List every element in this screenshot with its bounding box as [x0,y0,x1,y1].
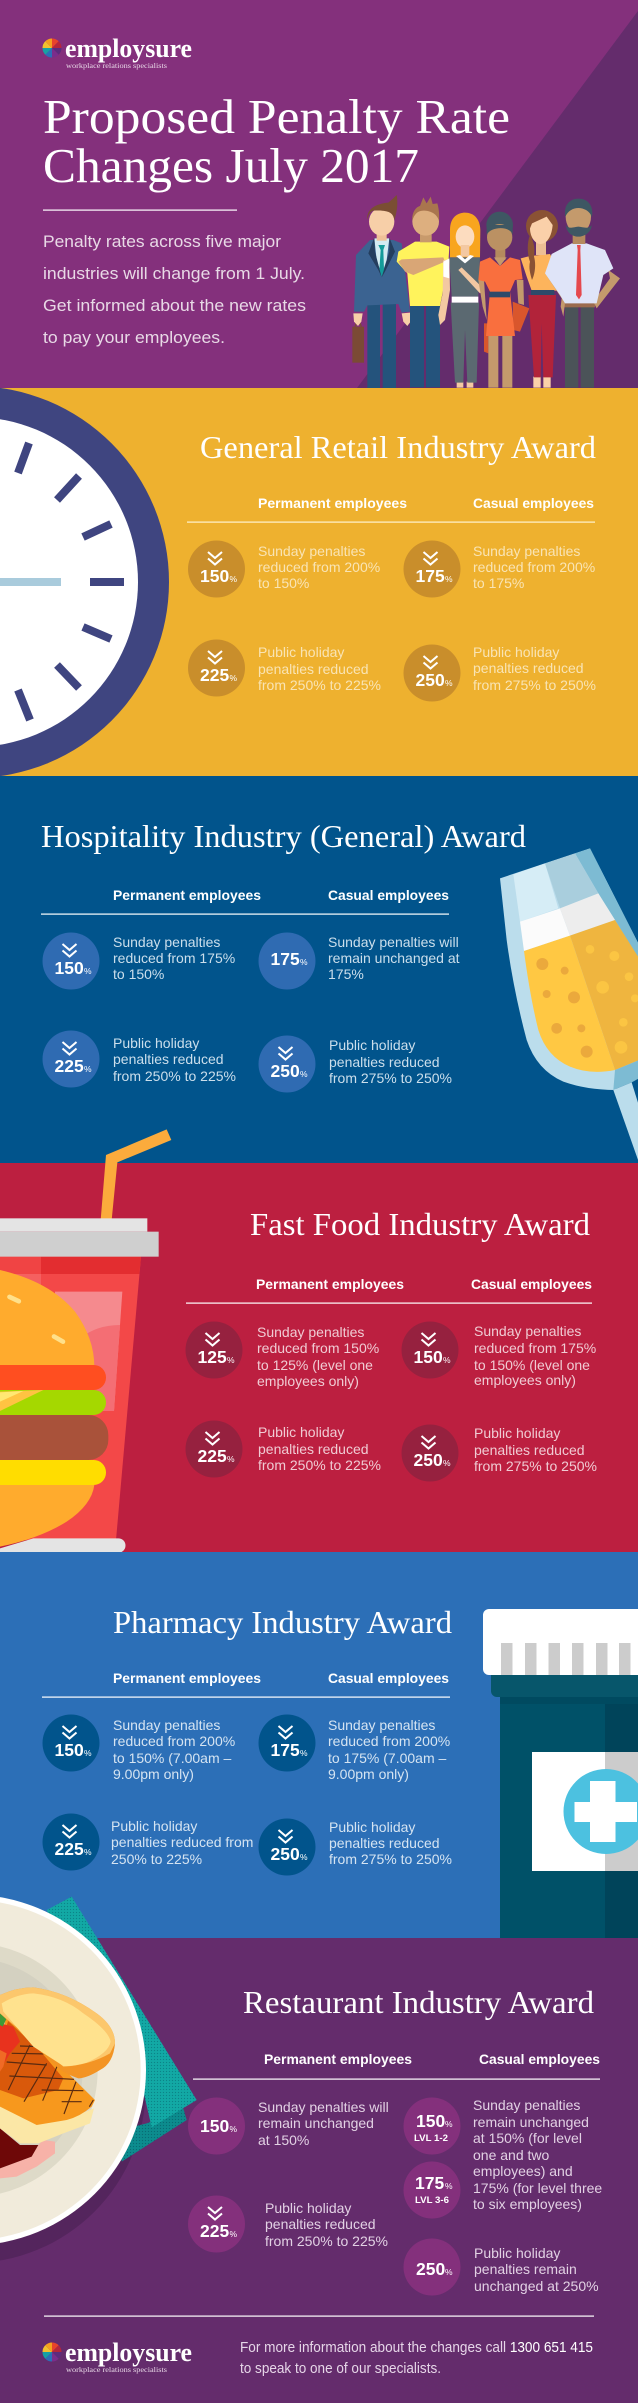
text: sunday permanent: 9.00pm only) [113,1766,194,1782]
text: sunday permanent: at 150% [258,2132,309,2148]
text: sunday casual: employees) and [473,2163,573,2179]
badge: 175%: 175 [270,949,300,969]
column headings: Permanent employees [264,2052,412,2067]
text: sunday casual: reduced from 200% [328,1733,450,1749]
logo [42,34,192,70]
panel: General Retail Industry Award [0,386,638,778]
text: public holiday permanent: from 250% to 225% [258,1457,381,1473]
text: sunday permanent: Sunday penalties will [258,2099,389,2115]
badge: 150%: % [84,966,92,976]
badge: 250% [404,2238,460,2296]
badge: 150% [188,540,245,598]
panel: Hospitality Industry (General) Award [0,776,638,1175]
text: sunday casual: 175% (for level three [473,2180,602,2196]
icon: pill bottle [483,1609,638,1939]
text: sunday permanent: reduced from 150% [257,1340,379,1356]
text: public holiday casual: Public holiday [474,2245,560,2261]
text: sunday permanent [113,1717,235,1782]
badge: 150%: 150 [200,2116,229,2136]
text: public holiday casual: from 275% to 250% [474,1458,597,1474]
text: sunday casual [328,934,460,982]
badge: 250%: 250 [270,1061,300,1081]
text: public holiday permanent [265,2200,388,2249]
text: public holiday casual: from 275% to 250% [329,1070,452,1086]
footer text: to speak to one of our specialists. [240,2361,441,2377]
text: sunday permanent: Sunday penalties [258,543,365,559]
text: public holiday casual [329,1819,452,1867]
badge: 150% level 1-2: % [445,2119,453,2129]
footer logo: workplace relations specialists [66,2366,167,2374]
person: man in yellow t-shirt [397,197,449,387]
logo: workplace relations specialists [66,62,167,70]
illustration: plate of food [0,1895,197,2263]
intro text: Penalty rates across five major [43,232,281,251]
text: sunday casual: Sunday penalties [328,1717,435,1733]
text: public holiday casual [474,1425,597,1474]
badge: 150% level 1-2 [404,2098,460,2154]
text: sunday permanent: remain unchanged [258,2115,374,2131]
heading: Pharmacy Industry Award [113,1604,452,1640]
person: bearded man in shirt [545,199,620,388]
badge: 125%: 125 [198,1347,227,1367]
badge: 150%: 150 [200,566,229,586]
illustration: cup and burger [0,1129,171,1553]
text: public holiday permanent: 250% to 225% [111,1851,202,1867]
text: sunday permanent [113,934,235,982]
text: sunday permanent: to 125% (level one [257,1357,373,1373]
column headings: Permanent employees [256,1277,404,1292]
person: man in suit [352,195,411,388]
text: public holiday permanent: penalties reduced [258,1441,369,1457]
text: public holiday permanent: Public holiday [258,644,344,660]
text: sunday casual: one and two [473,2147,549,2163]
heading: Hospitality Industry (General) Award [41,818,526,854]
column headings [42,1671,450,1698]
text: public holiday casual [329,1037,452,1086]
text: sunday casual: 175% [328,966,364,982]
badge: 250% [404,644,460,702]
badge: 225%: 225 [200,665,229,685]
badge: 150%: 150 [54,958,84,978]
header panel [0,0,638,388]
person: woman with braid [521,210,562,388]
column headings: Permanent employees [258,496,407,511]
text: sunday casual: Sunday penalties [473,543,580,559]
badge: 175%: 175 [270,1740,300,1760]
badge: 225% [188,640,245,696]
badge: 225%: % [227,1454,235,1464]
text: public holiday permanent: from 250% to 225% [113,1068,236,1084]
column headings [187,496,595,523]
person: woman in orange dress [478,212,529,388]
title: Proposed Penalty Rate [43,89,510,144]
text: public holiday casual [474,2245,599,2294]
text: public holiday casual: penalties remain [474,2261,577,2277]
column headings [193,2052,600,2080]
text: public holiday casual [473,644,596,693]
badge: 225%: % [230,2229,238,2239]
text: public holiday casual: from 275% to 250% [473,677,596,693]
badge: 150% [42,932,100,990]
column headings: Permanent employees [113,1671,261,1686]
intro text: industries will change from 1 July. [43,264,305,283]
footer text: For more information about the changes call 1300 651 415 [240,2340,593,2356]
badge: 150%: 150 [54,1740,84,1760]
badge: 150%: 150 [414,1347,443,1367]
text: sunday permanent [257,1324,379,1389]
text: sunday casual: 9.00pm only) [328,1766,409,1782]
text: public holiday permanent: penalties reduced from [111,1834,253,1850]
text: sunday permanent: Sunday penalties [113,1717,220,1733]
text: public holiday permanent: Public holiday [111,1818,197,1834]
badge: 150%: % [230,2124,238,2134]
footer text [240,2340,593,2377]
text: sunday casual [473,543,595,591]
badge: 175% level 3-6: % [445,2181,453,2191]
panel: Pharmacy Industry Award [0,1552,638,1939]
badge: 225%: 225 [200,2221,229,2241]
text: public holiday permanent: Public holiday [113,1035,199,1051]
badge: 150%: % [230,574,238,584]
column headings: Casual employees [479,2052,600,2067]
text: sunday permanent: to 150% (7.00am – [113,1750,232,1766]
text: sunday permanent: Sunday penalties [257,1324,364,1340]
text: sunday permanent: to 150% [258,575,309,591]
column headings [41,888,449,915]
column headings: Permanent employees [113,888,261,903]
text: sunday casual: Sunday penalties will [328,934,459,950]
text: sunday casual: Sunday penalties [473,2097,580,2113]
badge: 150% [402,1322,458,1378]
badge: 225% [42,1814,100,1870]
text: public holiday permanent: penalties reduced [258,661,369,677]
heading: Fast Food Industry Award [250,1206,590,1242]
badge: 250%: % [445,2267,453,2277]
column headings: Casual employees [328,888,449,903]
badge: 250% [258,1818,316,1876]
badge: 250%: % [445,678,453,688]
text: public holiday casual: Public holiday [473,644,559,660]
logo: employsure [65,34,192,63]
person: woman with orange hair [438,213,483,388]
badge: 250%: 250 [414,1450,443,1470]
badge: 175% [404,540,460,598]
badge: 225%: % [84,1847,92,1857]
text: public holiday permanent [111,1818,253,1867]
badge: 250%: % [300,1069,308,1079]
text: public holiday permanent: from 250% to 225% [265,2233,388,2249]
text: public holiday casual: Public holiday [329,1819,415,1835]
text: sunday permanent: to 150% [113,966,164,982]
column headings [186,1277,592,1304]
badge: 225% [188,2196,245,2252]
badge: 225%: 225 [54,1839,84,1859]
text: public holiday casual: penalties reduced [329,1835,440,1851]
text: public holiday casual: penalties reduced [474,1442,585,1458]
heading: Restaurant Industry Award [243,1984,594,2020]
people illustration [352,195,620,388]
text: sunday permanent: Sunday penalties [113,934,220,950]
intro text: Get informed about the new rates [43,296,306,315]
badge: 175% [258,1714,316,1772]
badge: 225% [42,1030,100,1088]
text: public holiday casual: Public holiday [329,1037,415,1053]
text: sunday casual [474,1323,596,1388]
badge: 175%: % [445,574,453,584]
text: public holiday casual: penalties reduced [473,660,584,676]
text: public holiday casual: unchanged at 250% [474,2278,599,2294]
badge: 125% [186,1322,242,1378]
badge: 175%: % [300,1748,308,1758]
text: public holiday permanent: Public holiday [258,1424,344,1440]
footer logo [42,2338,192,2374]
badge: 225%: % [230,673,238,683]
intro text [43,232,306,347]
heading: General Retail Industry Award [200,429,596,465]
column headings: Casual employees [471,1277,592,1292]
text: sunday casual: at 150% (for level [473,2130,582,2146]
badge: 150%: % [84,1748,92,1758]
badge: 150% level 1-2: 150 [416,2111,445,2131]
badge: 125%: % [227,1355,235,1365]
text: sunday casual [328,1717,450,1782]
badge: 250%: 250 [416,670,445,690]
column headings: Casual employees [473,496,594,511]
text: public holiday permanent: from 250% to 225% [258,677,381,693]
badge: 250% [258,1036,316,1092]
badge: 150% [42,1714,100,1772]
badge: 150% [188,2098,245,2154]
badge: 175% level 3-6: 175 [415,2173,444,2193]
text: sunday casual: to 175% [473,575,524,591]
text: public holiday casual: Public holiday [474,1425,560,1441]
text: public holiday casual: from 275% to 250% [329,1851,452,1867]
text: sunday permanent [258,2099,389,2148]
column headings: Casual employees [328,1671,449,1686]
badge: 175%: % [300,957,308,967]
text: public holiday permanent: penalties reduced [113,1051,224,1067]
badge: 250% [402,1424,458,1482]
text: sunday permanent: employees only) [257,1373,359,1389]
badge: 250%: % [443,1458,451,1468]
badge: 225%: % [84,1064,92,1074]
icon: beer glass [500,848,638,1175]
text: sunday casual: remain unchanged at [328,950,460,966]
title [43,89,510,193]
text: public holiday permanent: Public holiday [265,2200,351,2216]
text: sunday casual: remain unchanged [473,2114,589,2130]
badge: 225%: 225 [54,1056,84,1076]
text: sunday permanent: reduced from 200% [113,1733,235,1749]
text: sunday casual: reduced from 175% [474,1340,596,1356]
badge: 175%: 175 [416,566,445,586]
text: sunday casual: employees only) [474,1372,576,1388]
text: sunday casual: to 150% (level one [474,1357,590,1373]
text: sunday casual: to six employees) [473,2196,582,2212]
badge: 150%: % [443,1355,451,1365]
text: sunday casual: reduced from 200% [473,559,595,575]
text: sunday casual: to 175% (7.00am – [328,1750,447,1766]
badge: 250%: 250 [270,1844,300,1864]
text: public holiday permanent [258,1424,381,1473]
badge: 175% [258,932,316,990]
badge: 225% [186,1420,242,1478]
title: Changes July 2017 [43,138,419,193]
text: sunday permanent [258,543,380,591]
panel: Restaurant Industry Award [0,1895,638,2403]
badge: 175% level 3-6: LVL 3-6 [415,2195,449,2205]
badge: 225%: 225 [198,1446,227,1466]
badge: 150% level 1-2: LVL 1-2 [414,2133,448,2143]
panel: Fast Food Industry Award [0,1163,638,1553]
text: public holiday permanent [113,1035,236,1084]
badge: 175% level 3-6 [404,2162,460,2218]
text: public holiday permanent [258,644,381,693]
text: public holiday casual: penalties reduced [329,1054,440,1070]
footer logo: employsure [65,2338,192,2367]
text: sunday casual: Sunday penalties [474,1323,581,1339]
text: sunday permanent: reduced from 200% [258,559,380,575]
text: public holiday permanent: penalties reduced [265,2216,376,2232]
text: sunday permanent: reduced from 175% [113,950,235,966]
icon: clock [0,386,169,778]
intro text: to pay your employees. [43,328,225,347]
badge: 250%: % [300,1852,308,1862]
text: sunday casual [473,2097,602,2212]
badge: 250%: 250 [416,2259,445,2279]
